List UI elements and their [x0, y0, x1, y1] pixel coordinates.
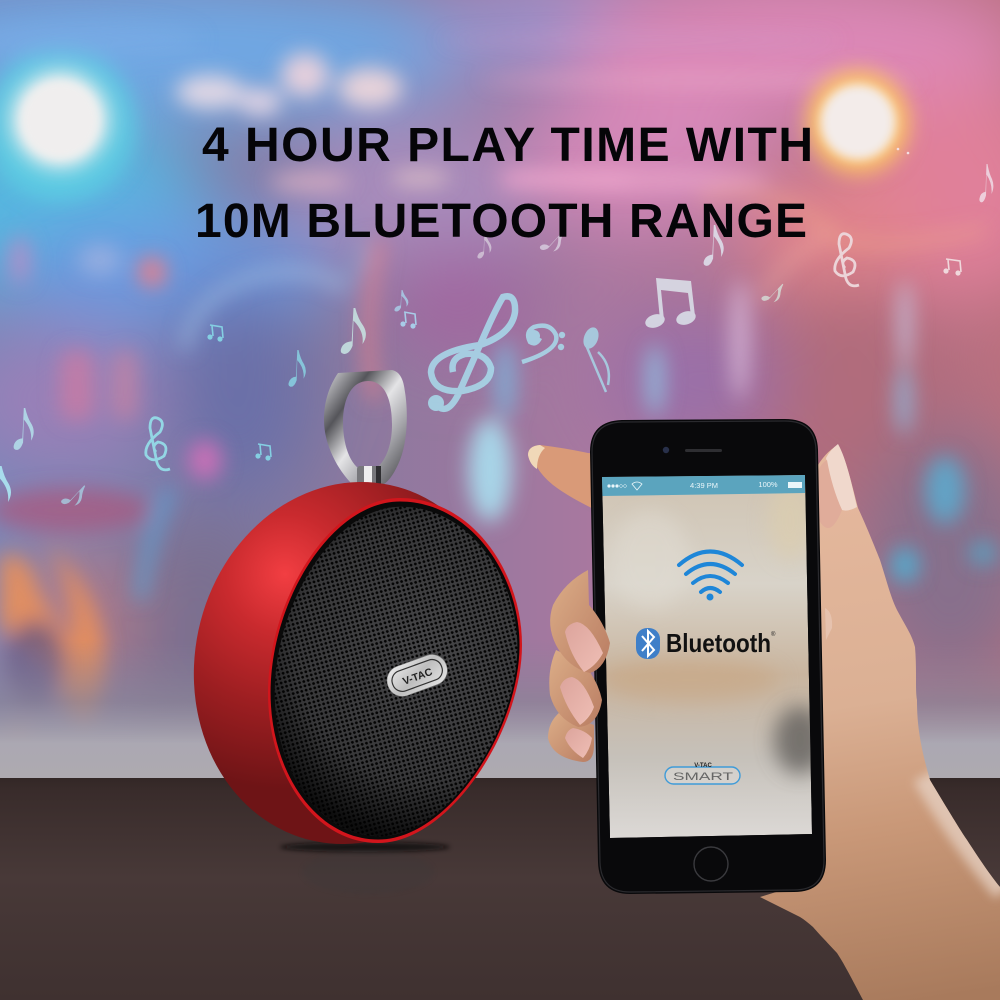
- cyan glow around left light: [0, 49, 136, 201]
- right side streaks: [468, 418, 512, 522]
- stage blobs top left: [176, 75, 244, 109]
- table surface: [0, 778, 1000, 1000]
- music notes: [0, 148, 993, 512]
- status bar: 100%: [758, 480, 778, 489]
- orange flame shape lower left: [0, 545, 105, 730]
- Bluetooth logo: ®: [771, 631, 776, 638]
- V-TAC SMART logo: [665, 763, 740, 784]
- status bar: 4:39 PM: [690, 481, 718, 490]
- smartphone: [590, 419, 826, 894]
- left fingers over phone edge: [548, 570, 610, 762]
- camera and earpiece: [663, 447, 722, 453]
- bokeh spots: [138, 257, 166, 287]
- grille: [275, 507, 517, 836]
- Bluetooth logo: Bluetooth: [666, 628, 771, 658]
- V-TAC badge: [383, 650, 452, 701]
- speaker: [161, 370, 543, 874]
- finger nail: [826, 444, 857, 511]
- title: [195, 119, 813, 248]
- third finger: [548, 712, 594, 762]
- V-TAC SMART logo: V-TAC: [694, 763, 712, 769]
- right hand: [760, 444, 1000, 1000]
- second finger: [549, 650, 602, 727]
- wrist highlight: [925, 775, 1000, 890]
- phone screen: [600, 475, 826, 838]
- wifi icon: [679, 552, 742, 600]
- left thumb behind phone: [528, 445, 600, 512]
- speaker reflection: [280, 842, 450, 894]
- stage lights: [12, 70, 910, 174]
- red rim: [268, 498, 522, 843]
- red body: [161, 452, 543, 874]
- blurred concert background: [0, 0, 1000, 778]
- ring hanger: [324, 370, 407, 487]
- upside-down note: [581, 325, 609, 392]
- V-TAC badge: V-TAC: [401, 666, 435, 688]
- title: 4 HOUR PLAY TIME WITH: [202, 119, 813, 172]
- V-TAC SMART logo: SMART: [673, 771, 733, 783]
- title: 10M BLUETOOTH RANGE: [195, 195, 807, 248]
- status bar: [602, 475, 805, 496]
- small clefs: [146, 234, 859, 470]
- small notes: [0, 164, 993, 512]
- tiny beamed notes: [210, 259, 961, 457]
- beamed note upper right: [643, 278, 698, 330]
- first finger: [550, 570, 610, 673]
- home button: [694, 847, 728, 881]
- bass clef: [522, 326, 565, 362]
- treble clef large: [428, 296, 515, 411]
